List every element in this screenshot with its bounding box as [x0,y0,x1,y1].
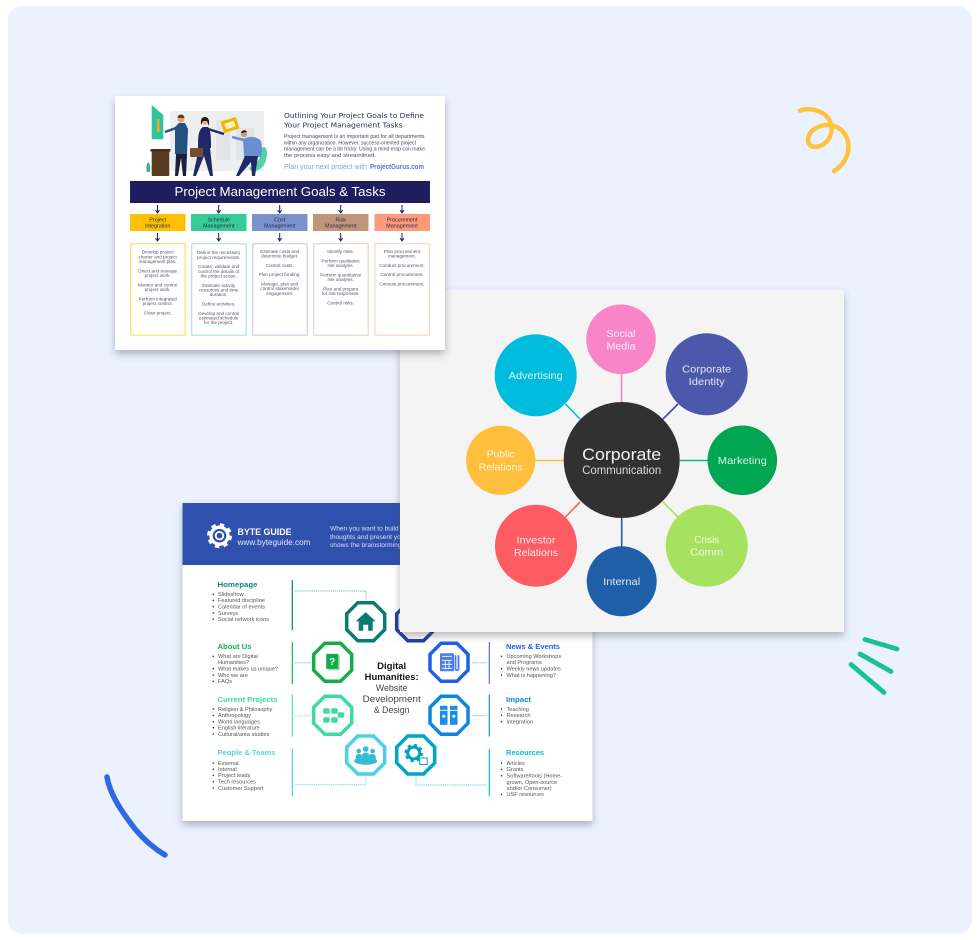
column: Schedule Management: Define activities. [202,302,235,306]
column: Schedule Management: Management [203,223,235,229]
column: Schedule Management: Define the necessary [197,250,241,255]
section: Resources: grown, Open-source [506,780,557,786]
section: About Us [212,642,311,685]
column: Project Integration: Close project. [144,310,172,316]
section: Current Projects: English literature [218,726,260,732]
column: Project Integration: Monitor and control [138,282,177,288]
node: Public Relations: Relations [479,462,523,474]
column: Schedule Management: estimated schedule [199,316,239,320]
section: Homepage: Social network icons [218,617,269,623]
icon: newspaper octagon [430,643,468,681]
section: Homepage [212,580,366,630]
column: Cost Management: Management [264,223,296,229]
column: Procurement Management: Management [386,223,418,229]
node: Marketing: Marketing [718,455,767,467]
central title: Development [363,694,421,704]
node: Public Relations: Public [487,448,515,460]
column: Schedule Management [191,214,246,335]
section: News & Events: and Programs [506,660,542,666]
brand url: www.byteguide.com [237,537,310,547]
section: About Us: Who we are [218,673,248,679]
icon: people octagon [347,736,385,774]
section: People & Teams: External [218,761,239,767]
brand name: BYTE GUIDE [238,527,292,538]
section: Current Projects: Cultural/area studies [218,732,270,738]
node: Advertising [495,334,577,416]
scribble: blue curve [107,777,165,855]
section: People & Teams: Project leads [218,773,251,779]
section: People & Teams: Tech resources [218,780,256,786]
column: Risk Management: risk analysis. [328,263,354,268]
node: Corporate Communication centre: Communication [582,465,661,477]
column: Schedule Management: Estimate activity [202,283,236,288]
column: Risk Management: Perform qualitative [322,258,360,264]
column: Risk Management: Management [325,223,357,229]
column: Cost Management: Cost [274,218,286,224]
section: Impact: Integration [506,720,533,726]
icon: gear octagon [397,736,435,774]
section: People & Teams [212,748,366,796]
column: Risk Management [313,214,368,335]
section: About Us: What makes us unique? [218,666,278,672]
column: Procurement Management: Procurement [387,218,418,224]
icon: flow chart octagon [314,696,352,734]
node: Investor Relations: Investor [516,534,556,546]
title banner: Project Management Goals & Tasks [174,184,386,199]
icon: gear logo [209,525,230,546]
node: Social Media: Media [606,340,636,352]
node: Investor Relations [495,505,577,587]
icon: navy octagon [397,603,435,641]
column: Project Integration [130,214,186,335]
section: News & Events: What is happening? [506,673,556,679]
node: Corporate Communication centre: Corporate [582,445,661,464]
section: News & Events: Weekly news updates [506,666,561,672]
section: People & Teams: Internal [218,767,237,773]
central title [363,661,421,715]
column: Procurement Management [374,214,430,335]
section: Resources [416,748,562,798]
column: Project Integration: project work. [145,287,171,292]
header intro text [330,526,439,549]
icon: question book octagon: ? [329,657,335,668]
header band [182,503,592,565]
column: Schedule Management: control the details of [198,269,240,274]
panel: Project Management Goals & Tasks [115,96,445,350]
section: About Us: What are Digital [218,654,258,660]
node: Advertising: Advertising [509,370,563,382]
column: Risk Management: Risk [335,218,346,224]
node: Corporate Communication centre [564,402,680,518]
intro heading: Outlining Your Project Goals to Define [284,111,424,120]
central title: Humanities: [365,672,419,682]
column: Project Integration: management plan. [139,259,177,264]
section: Homepage: Surveys [218,611,238,617]
central title: & Design [374,705,410,715]
node: Crisis Comm: Crisis [694,534,719,546]
icon: columns octagon [430,696,468,734]
column: Cost Management: engagement. [266,291,293,296]
column: Risk Management: Perform quantitative [320,272,362,278]
intro paragraph: Project management is an important part for all departments [284,134,425,140]
column: Schedule Management: duration. [210,292,228,297]
section: Resources: Grants [506,767,523,773]
intro paragraph: the process easy and streamlined. [284,153,376,159]
intro paragraph: management can be a bit tricky. Using a mind map can make [284,147,425,153]
column: Cost Management: Plan project funding. [259,272,301,277]
section: Resources: USF resources [506,792,544,798]
section: Current Projects [212,694,311,738]
column: Schedule Management: Create, validate and [198,264,240,269]
section: Resources: Software/tools (Home- [506,774,562,780]
section: Impact: Teaching [506,707,529,713]
section: Current Projects: World languages [218,720,260,726]
column: Risk Management: Plan and prepare [323,286,359,292]
call to action [284,164,424,171]
node: Marketing [708,426,777,495]
node: Corporate Identity: Identity [689,376,725,388]
title banner [130,181,430,203]
column: Project Integration: Perform integrated [139,296,177,302]
column: Cost Management: control stakeholder [260,286,300,291]
column: Risk Management: Identify risks. [327,249,354,254]
section: Current Projects: Current Projects [218,695,278,704]
column: Procurement Management: Console procurement. [379,282,425,286]
section: About Us: Humanities? [218,660,249,666]
column: Project Integration: project control. [143,301,173,306]
column: Schedule Management: Develop and control [198,311,239,316]
arrows [156,205,404,241]
header intro text: shows the brainstorming process [330,542,427,549]
column: Schedule Management: project requirements. [197,255,240,260]
section: Resources: and/or Consumer) [506,786,552,792]
panel: Corporate Communication mind map [400,290,844,632]
column: Project Integration: Integration [145,223,170,229]
section: Impact [472,694,533,736]
intro heading [283,111,424,129]
scribble: yellow loop [800,109,849,171]
column: Cost Management: Control costs. [266,263,294,268]
intro heading: Your Project Management Tasks [283,120,403,129]
section: News & Events: News & Events [506,642,560,651]
node: Internal: Internal [603,576,640,588]
central title: Website [376,683,408,693]
section: Resources: Resources [506,748,544,757]
column: Project Integration: project work. [145,273,171,278]
intro paragraph [284,134,425,159]
column: Project Integration: Direct and manage [138,268,178,274]
column: Cost Management: Estimate costs and [260,249,300,254]
section: Homepage: Calendar of events [218,604,265,610]
column: Risk Management: for risk responses. [322,291,359,296]
intro paragraph: within any organization. However, success-oriented project [284,140,417,146]
section: Homepage: Featured discipline [218,598,265,604]
section: Current Projects: Religion & Philosophy [218,707,273,713]
node: Crisis Comm [666,505,748,587]
icon: home octagon [347,603,385,641]
node: Crisis Comm: Comm [690,546,723,558]
section: News & Events: Upcoming Workshops [506,654,561,660]
node: Corporate Identity [666,333,748,415]
node: Corporate Identity: Corporate [682,364,731,376]
header intro text: thoughts and present your ideas, this [330,534,439,541]
node: Internal [587,546,657,616]
column: Cost Management: Manage, plan and [261,282,299,286]
column: Procurement Management: management. [388,254,416,258]
column: Cost Management [252,214,308,335]
section: Impact: Impact [506,695,532,704]
column: Schedule Management: Schedule [207,218,230,224]
node: Public Relations [466,426,535,495]
panel: Byte Guide mind map [182,503,592,821]
section: People & Teams: People & Teams [218,748,276,757]
section: Resources: Articles [506,761,525,767]
column: Project Integration: Develop project [142,250,174,254]
column: Project Integration: Project [149,218,167,224]
column: Procurement Management: Control procurement. [380,272,424,277]
section: Current Projects: Anthropology [218,713,251,719]
call to action: Plan your next project with [284,164,367,171]
connector lines [535,372,710,548]
node: Social Media [586,304,656,374]
call to action: ProjectGurus.com [370,164,424,171]
node: Investor Relations: Relations [514,547,558,559]
column: Project Integration: charter and project [139,254,178,260]
icon: question book octagon [314,643,352,681]
column: Schedule Management: the project scope. [201,274,237,278]
section: People & Teams: Customer Support [218,786,264,792]
section: Homepage: Homepage [218,580,258,589]
column: Schedule Management: for the project. [204,320,233,325]
column: Cost Management: determine budget. [261,254,298,258]
illustration: office team [146,105,267,176]
section: News & Events [472,642,561,684]
central title: Digital [377,661,406,671]
node: Social Media: Social [606,328,636,340]
section: Impact: Research [506,713,530,719]
scribble: teal strokes [851,640,897,692]
column: Procurement Management: Plan procurement [384,249,421,254]
column: Procurement Management: Conduct procurement. [379,263,425,268]
header intro text: When you want to build your [330,526,414,533]
column: Risk Management: risk analysis. [328,277,354,282]
section: About Us: FAQs [218,679,232,685]
column: Risk Management: Control risks. [327,300,354,306]
section: Homepage: Slideshow [218,592,244,598]
column: Schedule Management: resources and time [199,288,239,292]
section: About Us: About Us [218,642,252,651]
